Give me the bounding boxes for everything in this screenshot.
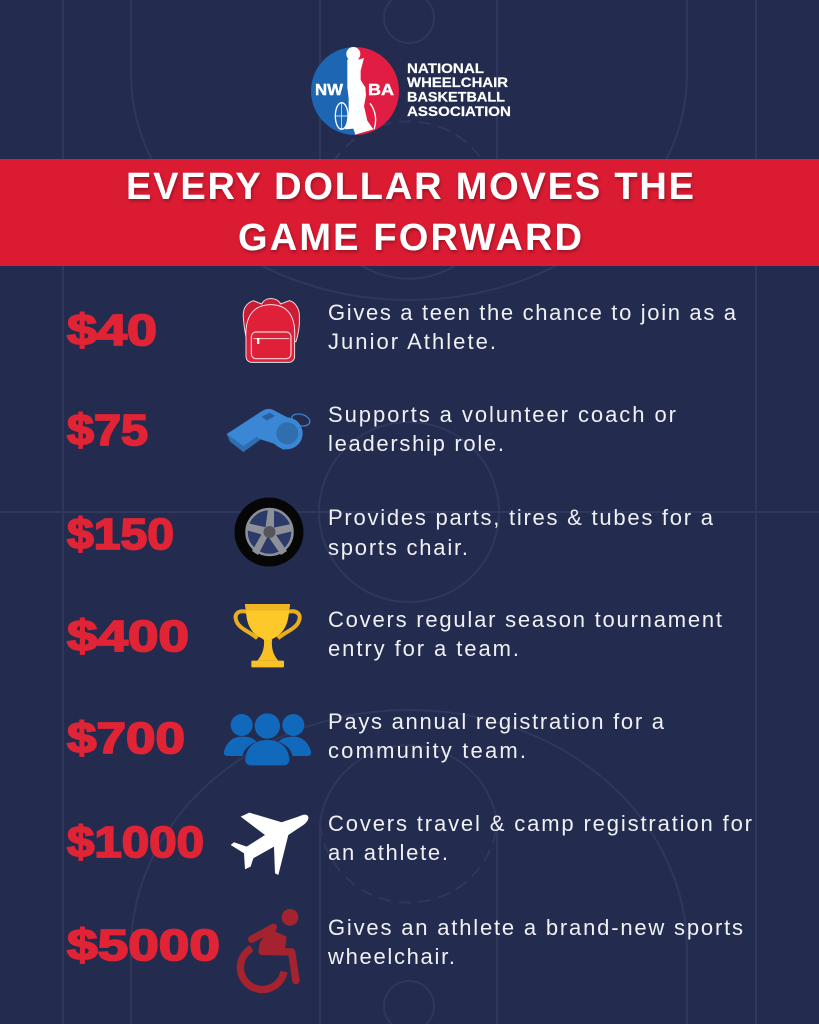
logo: athlete silhouette xyxy=(335,47,376,135)
icon: wheelchair xyxy=(240,909,298,990)
organization name: ASSOCIATION xyxy=(407,104,511,119)
icon: trophy xyxy=(236,604,300,667)
icon: tire xyxy=(234,498,304,566)
logo xyxy=(311,47,511,135)
description: community team. xyxy=(328,738,526,763)
row: $75 xyxy=(67,402,676,456)
description xyxy=(328,811,752,865)
amount: $75 xyxy=(67,406,148,455)
amount: $40 xyxy=(67,306,157,355)
description xyxy=(328,709,665,763)
logo: initials: NW xyxy=(315,82,343,99)
description: Gives an athlete a brand-new sports xyxy=(328,915,743,940)
description: an athlete. xyxy=(328,840,448,865)
description xyxy=(328,607,722,661)
description: Covers regular season tournament xyxy=(328,607,722,632)
description xyxy=(328,300,737,354)
row: $700 xyxy=(67,709,665,765)
amount: $400 xyxy=(67,612,189,661)
organization name: NATIONAL xyxy=(407,61,484,76)
description xyxy=(327,915,743,969)
amount: $1000 xyxy=(67,818,204,867)
description: Pays annual registration for a xyxy=(328,709,665,734)
row: $400 xyxy=(67,604,722,667)
description: sports chair. xyxy=(328,535,468,560)
amount: $150 xyxy=(67,510,174,559)
row: $40 xyxy=(67,298,737,362)
organization name xyxy=(407,61,511,119)
description xyxy=(328,505,714,560)
description: leadership role. xyxy=(328,431,504,456)
organization name: BASKETBALL xyxy=(407,90,505,104)
description: Provides parts, tires & tubes for a xyxy=(328,505,714,530)
icon: team xyxy=(224,713,311,765)
icon: whistle xyxy=(227,409,311,452)
title xyxy=(126,166,694,259)
logo: blue and red circle xyxy=(311,47,399,135)
icon: airplane xyxy=(231,813,308,875)
description: entry for a team. xyxy=(328,636,519,661)
banner xyxy=(0,159,819,266)
description: wheelchair. xyxy=(327,944,455,969)
amount: $5000 xyxy=(67,921,220,970)
description: Supports a volunteer coach or xyxy=(328,402,676,427)
amount: $700 xyxy=(67,714,185,763)
row: $1000 xyxy=(67,811,752,875)
logo: initials xyxy=(315,82,394,99)
row: $5000 xyxy=(67,909,743,990)
description: Gives a teen the chance to join as a xyxy=(328,300,737,325)
description: Junior Athlete. xyxy=(328,329,496,354)
icon: backpack xyxy=(243,298,299,362)
description: Covers travel & camp registration for xyxy=(328,811,752,836)
description xyxy=(328,402,676,456)
row: $150 xyxy=(67,498,714,566)
organization name: WHEELCHAIR xyxy=(407,75,508,90)
logo: initials: BA xyxy=(368,82,394,99)
title: GAME FORWARD xyxy=(238,217,582,259)
title: EVERY DOLLAR MOVES THE xyxy=(126,166,694,208)
